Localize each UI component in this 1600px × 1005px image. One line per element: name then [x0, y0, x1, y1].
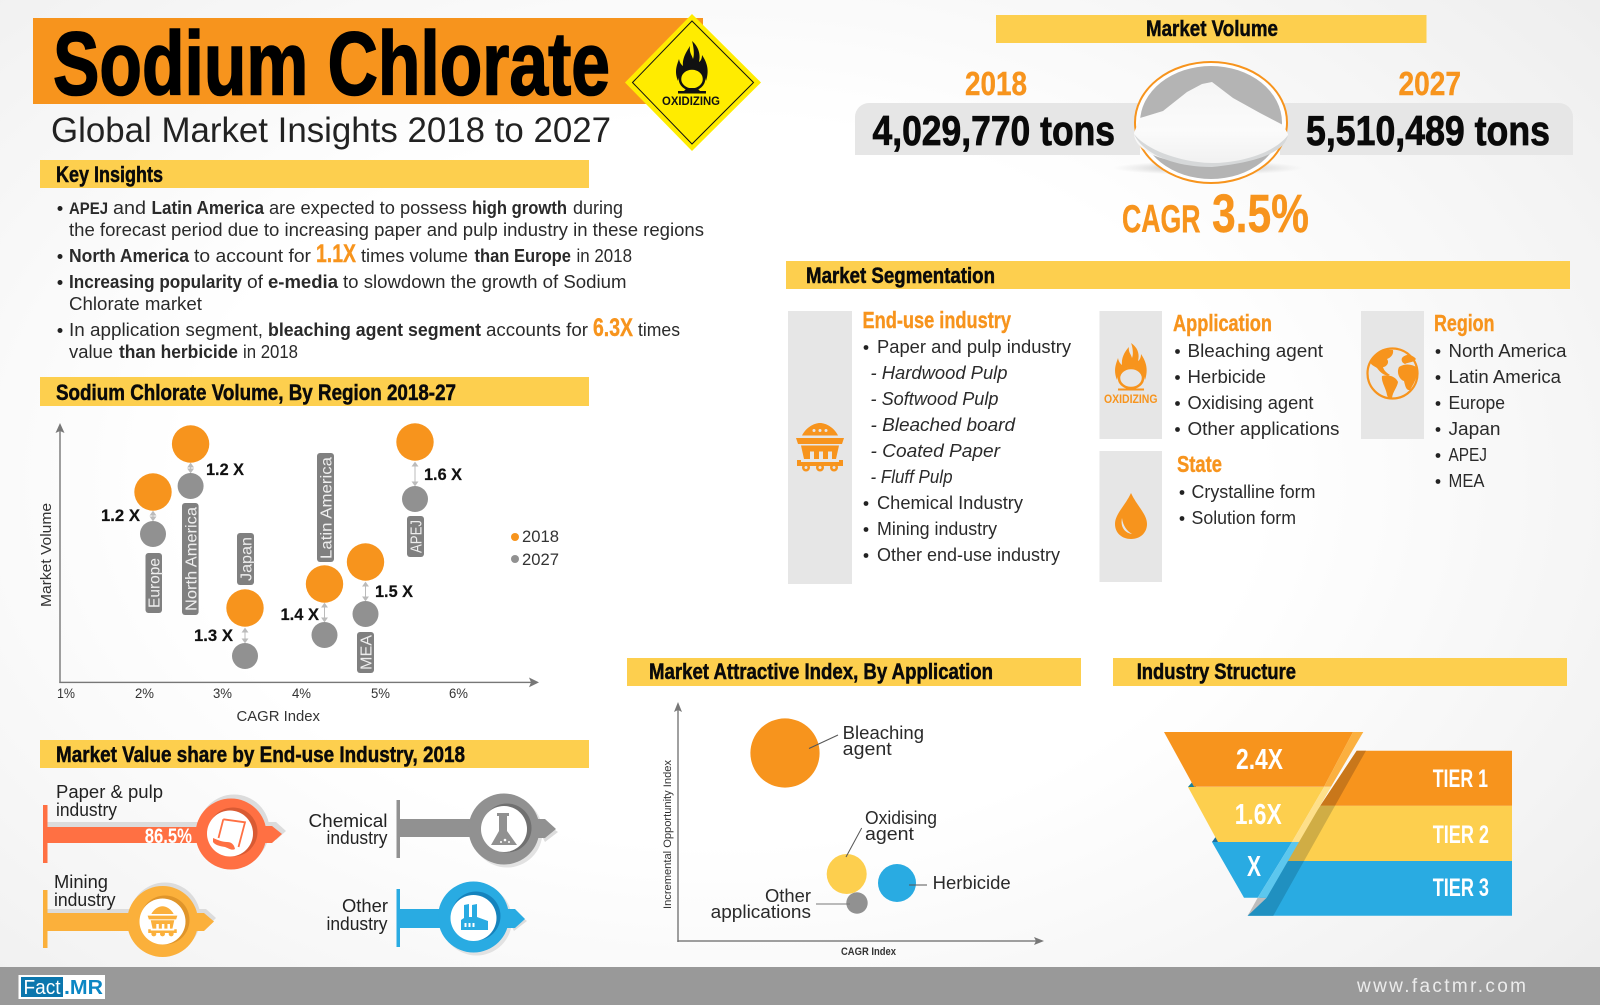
end-use list: Other end-use industry	[877, 545, 1060, 565]
heading: industry structure: Industry Structure	[1137, 659, 1296, 684]
label: Mining	[54, 872, 108, 892]
series: Japan: 1.3 X	[194, 626, 234, 645]
label: Paper & pulp	[56, 782, 163, 802]
text block: insight 1: APEJ	[69, 200, 108, 218]
icon: oxidizing hazard diamond	[625, 14, 761, 151]
axis labels: Market Volume	[38, 503, 55, 607]
axis labels: 1%	[57, 685, 75, 701]
icon: mine cart	[796, 423, 844, 472]
panel: chemical share	[308, 794, 558, 868]
axis labels: CAGR Index	[236, 708, 320, 725]
text block: insight 1: during	[573, 198, 623, 218]
region list: Japan	[1448, 419, 1500, 439]
panel: market volume figures	[855, 62, 1573, 244]
legend: 2027	[522, 550, 559, 569]
end-use list: - Hardwood Pulp	[870, 363, 1008, 383]
chart: volume by region bubble chart	[38, 423, 559, 725]
icon: factory	[461, 904, 488, 930]
text block: insight 3: Increasing popularity	[69, 272, 242, 292]
application list: Herbicide	[1188, 367, 1266, 387]
panel: paper and pulp share	[43, 782, 286, 870]
funnel labels	[1235, 744, 1284, 883]
region list: Latin America	[1448, 367, 1562, 387]
label: industry	[56, 800, 117, 820]
axis labels: Incremental Opportunity Index	[662, 759, 674, 909]
text block: insight 3	[58, 272, 626, 314]
CAGR callout	[1122, 184, 1309, 244]
end-use list: Mining industry	[877, 519, 997, 539]
heading: market value share: Market Value share by End-use Industry, 2018	[56, 742, 465, 767]
axis labels: CAGR Index	[841, 946, 897, 958]
value label: 86.5%	[145, 825, 192, 848]
chart: market attractive index bubbles	[662, 702, 1044, 958]
bubble: herbicide: Herbicide	[933, 873, 1011, 893]
icon: globe	[1368, 348, 1418, 399]
funnel labels: 1.6X	[1235, 799, 1282, 831]
website url: www.factmr.com	[1356, 976, 1526, 997]
application list: Other applications	[1188, 419, 1340, 439]
text block: insight 3: to slowdown the growth of Sodium	[343, 272, 626, 292]
text block: insight 4: In application segment,	[69, 320, 263, 340]
application list	[1175, 341, 1340, 439]
text block: insight 2: times volume	[361, 246, 468, 266]
text block: insight 2: than Europe	[474, 246, 571, 266]
axis labels: 6%	[449, 685, 468, 701]
label: industry	[326, 914, 388, 934]
tier labels: TIER 1	[1433, 765, 1488, 793]
bubble: bleaching agent: Bleaching	[843, 723, 924, 743]
text block: insight 1: are expected to possess	[269, 198, 467, 218]
end-use heading: End-use industry	[862, 307, 1011, 333]
state list: Crystalline form	[1192, 482, 1316, 502]
end-use list: - Coated Paper	[870, 441, 1001, 461]
label	[54, 872, 116, 910]
funnel labels: X	[1247, 851, 1261, 883]
title banner: Sodium Chlorate	[53, 14, 610, 114]
series: Europe	[101, 473, 172, 613]
application heading: Application	[1173, 310, 1272, 336]
series: Japan	[194, 533, 264, 669]
text block: insight 2	[58, 240, 632, 268]
volume 2018 pill: 2018	[965, 65, 1027, 102]
series: Latin America: Latin America	[318, 457, 336, 559]
CAGR callout: 3.5%	[1212, 184, 1309, 244]
series: Japan: Japan	[238, 537, 256, 581]
region list: North America	[1448, 341, 1568, 361]
label: Chemical	[308, 811, 388, 831]
heading: volume by region: Sodium Chlorate Volume, By Region 2018-27	[56, 380, 456, 405]
axis labels: 3%	[213, 685, 232, 701]
series: Latin America: 1.4 X	[280, 605, 320, 624]
text block: insight 4: 6.3X	[593, 314, 633, 342]
text block: insight 2: 1.1X	[316, 240, 356, 268]
end-use list: Chemical Industry	[877, 493, 1023, 513]
text block: insight 3: Chlorate market	[69, 294, 202, 314]
heading: market segmentation: Market Segmentation	[806, 263, 995, 288]
series: APEJ	[396, 423, 463, 557]
axis labels: 2%	[135, 685, 154, 701]
tier labels: TIER 2	[1433, 821, 1489, 849]
heading: industry structure	[1113, 658, 1567, 686]
bubble: oxidising agent: Oxidising	[865, 808, 937, 828]
logo: Fact.MR: Fact	[24, 977, 61, 999]
heading: key insights	[40, 160, 589, 188]
label	[326, 896, 388, 934]
series: Europe: Europe	[146, 558, 164, 608]
footer bar	[0, 967, 1600, 1005]
icon: flask	[491, 813, 517, 845]
end-use list	[864, 337, 1071, 565]
series: North America	[172, 425, 245, 615]
series: North America: North America	[184, 507, 200, 611]
region list: MEA	[1448, 471, 1484, 491]
series: APEJ: APEJ	[408, 520, 426, 553]
text block: insight 1	[58, 198, 704, 240]
axis labels	[38, 503, 468, 725]
volume 2018 pill: 4,029,770 tons	[872, 107, 1115, 154]
application list: Bleaching agent	[1188, 341, 1323, 361]
heading: market volume: Market Volume	[1146, 16, 1278, 41]
bubble: other applications: Other	[765, 886, 811, 906]
icon: mine cart	[148, 906, 177, 936]
funnel segments	[1164, 732, 1363, 898]
series: North America: 1.2 X	[206, 460, 245, 479]
icon: paper sheet	[213, 819, 245, 850]
bubble: bleaching agent	[750, 718, 924, 788]
series: MEA	[347, 543, 414, 673]
text block: insight 4: accounts for	[486, 320, 588, 340]
panel: mining share	[43, 872, 216, 957]
bubble: other applications: applications	[711, 902, 811, 922]
label: Other	[342, 896, 388, 916]
series: Europe: 1.2 X	[101, 506, 141, 525]
state list: Solution form	[1192, 508, 1296, 528]
panel: region	[1361, 310, 1568, 491]
heading: market attractive index: Market Attractive Index, By Application	[649, 659, 993, 684]
panel: state	[1100, 451, 1316, 582]
heading: market segmentation	[786, 261, 1570, 289]
icon: oxidizing flame	[1104, 343, 1158, 406]
text block: insight 4: value	[69, 342, 113, 362]
region heading: Region	[1434, 310, 1494, 336]
series: MEA: 1.5 X	[375, 582, 414, 601]
subtitle: Global Market Insights 2018 to 2027	[51, 111, 611, 150]
region list	[1436, 341, 1568, 491]
axes	[674, 702, 1044, 945]
icon: liquid drop	[1115, 493, 1147, 539]
legend	[511, 527, 559, 569]
state list	[1180, 482, 1316, 528]
series: APEJ: 1.6 X	[424, 465, 463, 484]
volume 2027 pill: 5,510,489 tons	[1306, 107, 1550, 154]
axes	[56, 423, 539, 687]
funnel labels: 2.4X	[1236, 744, 1284, 776]
label: industry	[54, 890, 116, 910]
image: sodium chlorate powder in bowl	[1113, 62, 1303, 183]
region list: APEJ	[1448, 445, 1487, 465]
chart: industry structure funnel	[1164, 732, 1512, 916]
bubble: oxidising agent: agent	[865, 824, 914, 844]
panel: end-use industry	[788, 307, 1071, 584]
bubble: herbicide	[878, 864, 1011, 902]
volume 2027 pill	[1280, 65, 1573, 155]
text block: insight 4: bleaching agent segment	[268, 320, 481, 340]
bubble: bleaching agent: agent	[843, 739, 892, 759]
volume 2018 pill	[855, 65, 1140, 155]
end-use list: - Fluff Pulp	[870, 467, 952, 487]
text block: insight 2: in 2018	[576, 246, 632, 266]
icon: oxidizing flame: OXIDIZING	[1104, 394, 1158, 406]
volume 2027 pill: 2027	[1398, 65, 1461, 102]
CAGR callout: CAGR	[1122, 198, 1200, 241]
axis labels: 4%	[292, 685, 311, 701]
heading: market volume	[996, 15, 1426, 43]
logo: Fact.MR	[18, 975, 105, 999]
series: MEA: MEA	[358, 634, 376, 670]
series: Latin America	[280, 453, 343, 648]
text block: insight 3: of	[247, 272, 264, 292]
text block: insight 2: North America	[69, 246, 190, 266]
bubble: other applications	[711, 886, 868, 922]
legend: 2018	[522, 527, 559, 546]
state heading: State	[1177, 451, 1222, 477]
application list: Oxidising agent	[1188, 393, 1314, 413]
end-use list: Paper and pulp industry	[877, 337, 1071, 357]
end-use list: - Bleached board	[870, 415, 1016, 435]
logo: Fact.MR: .MR	[64, 977, 104, 999]
heading: key insights: Key Insights	[56, 162, 163, 187]
text block: insight 4: than herbicide	[119, 342, 238, 362]
text block: insight 3: e-media	[268, 272, 339, 292]
end-use list: - Softwood Pulp	[870, 389, 998, 409]
tier labels: TIER 3	[1433, 874, 1489, 902]
panel: application	[1100, 310, 1340, 439]
text block: insight 1: high growth	[472, 198, 567, 218]
icon: oxidizing hazard diamond: OXIDIZING	[662, 96, 720, 108]
text block: insight 4	[58, 314, 680, 362]
region list: Europe	[1448, 393, 1505, 413]
text block: insight 2: to account for	[194, 246, 311, 266]
axis labels	[662, 759, 897, 958]
panel: key insights	[40, 160, 704, 362]
text block: insight 1: and	[113, 198, 146, 218]
tier bands	[1248, 751, 1512, 916]
axis labels: 5%	[371, 685, 390, 701]
label	[308, 811, 388, 848]
text block: insight 1: the forecast period due to increasing paper and pulp industry in these regions	[69, 220, 704, 240]
bubble: oxidising agent	[827, 808, 937, 894]
text block: insight 4: in 2018	[243, 342, 298, 362]
label	[56, 782, 163, 820]
text block: insight 4: times	[638, 320, 680, 340]
panel: other share	[326, 882, 527, 956]
label: industry	[326, 828, 388, 848]
text block: insight 1: Latin America	[152, 198, 265, 218]
tier labels	[1433, 765, 1489, 902]
